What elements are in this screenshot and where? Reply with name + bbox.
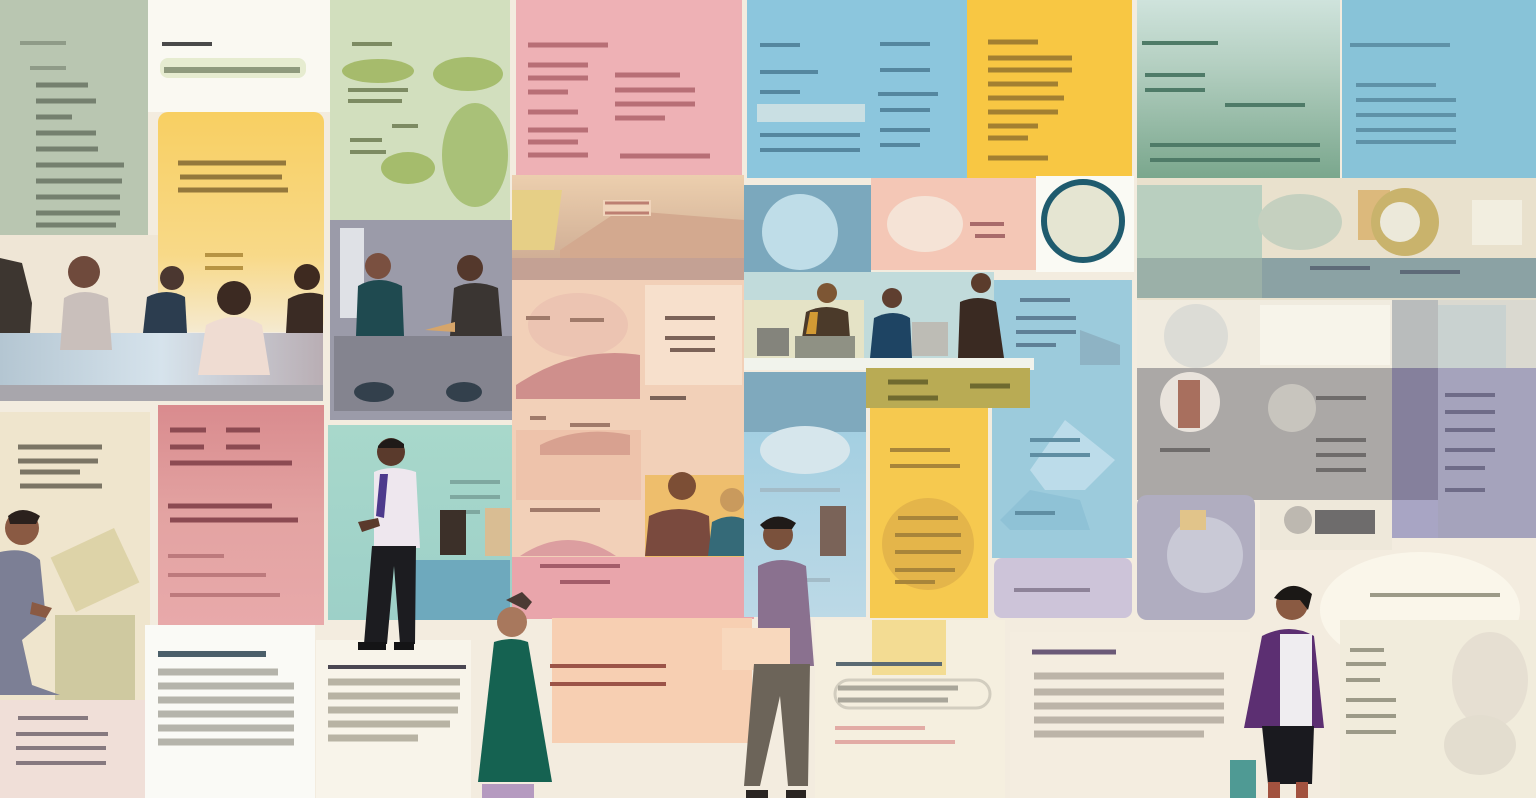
- panel: green bubbles: [330, 0, 510, 220]
- figure: standing man with tie: [358, 438, 420, 650]
- panel: sand band: [512, 175, 744, 280]
- panel: top-left sage: [0, 0, 148, 235]
- figure: woman at left: [0, 510, 60, 695]
- illustration: meeting table and people: [0, 235, 323, 401]
- figure: woman in purple jacket: [1230, 586, 1324, 798]
- panel: grey meeting scene: [330, 220, 512, 420]
- panel: bright yellow: [967, 0, 1132, 178]
- panel: pink band: [512, 557, 754, 619]
- panel: sky-blue top: [747, 0, 967, 178]
- panel: lower white text: [145, 625, 315, 798]
- icon: dark ring: [1036, 176, 1134, 272]
- panel: lower text column: [316, 640, 471, 798]
- panel: yellow callout: [158, 112, 324, 332]
- panel: lower text right: [1010, 632, 1250, 798]
- panel: lower left pink strip: [0, 700, 145, 798]
- panel: light blue column: [992, 280, 1132, 558]
- panel: blush with bubble: [871, 178, 1036, 270]
- illustration: two people at sunset: [645, 472, 746, 557]
- illustration: three people at desk: [744, 272, 1034, 370]
- panel: teal with standing man: [328, 425, 512, 620]
- panel: sand band with circle icons: [1137, 178, 1536, 300]
- figure: man in mauve sweater: [722, 516, 814, 798]
- panel: purple-grey right column: [1392, 300, 1536, 538]
- panel: cream lower wide: [815, 620, 1005, 798]
- panel: pink top centre: [516, 0, 742, 175]
- panel: pale teal top right: [1137, 0, 1340, 180]
- panel: olive banner: [866, 368, 1030, 408]
- panel: pale blue column: [744, 372, 866, 617]
- figure: woman in green coat: [478, 592, 552, 798]
- panel: yellow column with circle: [870, 408, 988, 618]
- panel: pink text block: [158, 405, 324, 625]
- panel: blue top right: [1342, 0, 1536, 178]
- panel: cream thought cloud: [1320, 552, 1536, 798]
- panel: peach callout: [550, 618, 752, 743]
- panel: peach column: [512, 280, 744, 560]
- panel: lavender box: [994, 558, 1132, 618]
- panel: blue circle: [744, 185, 871, 300]
- panel: grey-beige icon grid: [1137, 300, 1392, 500]
- panel: cream text lower left: [0, 412, 150, 712]
- panel: top white heading: [148, 0, 332, 112]
- panel: lavender box right: [1137, 495, 1392, 620]
